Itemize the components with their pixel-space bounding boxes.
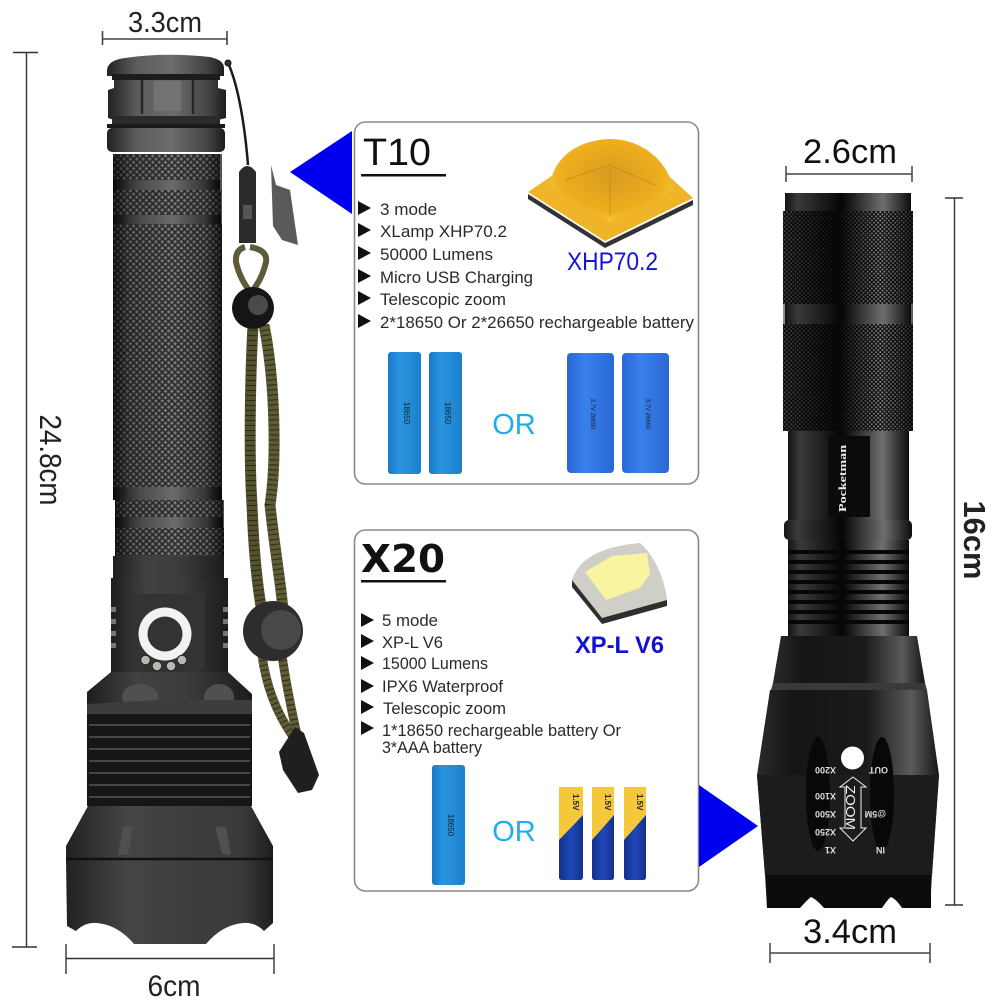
zoom scale markings	[815, 765, 888, 855]
batteries: three AAA	[559, 787, 646, 880]
dimension: 2.6cm top width of X20: 2.6cm	[803, 133, 897, 171]
feature list: T10: XLamp XHP70.2	[380, 222, 507, 241]
zoom scale markings: @5M	[865, 809, 886, 819]
label: XHP70.2: XHP70.2	[567, 248, 658, 276]
LED chip: XHP70.2	[528, 139, 693, 248]
heading: X20: X20	[361, 537, 445, 581]
batteries: three AAA: 1.5V	[635, 794, 644, 811]
knurled grip	[783, 211, 913, 431]
LED chip: XP-L V6	[572, 543, 667, 624]
zoom head	[757, 636, 939, 908]
T10 flashlight	[66, 55, 319, 944]
batteries: three AAA: 1.5V	[603, 794, 612, 811]
dimension: 24.8cm length of T10	[12, 52, 68, 947]
pointer: blue triangle to X20 flashlight	[699, 785, 758, 867]
batteries: three AAA: 1.5V	[571, 794, 580, 811]
heading: T10: T10	[363, 132, 431, 174]
zoom scale markings: X100	[815, 791, 836, 801]
barrel with brand: Pocketman	[837, 445, 849, 512]
dimension: 2.6cm top width of X20	[786, 133, 912, 182]
feature list: X20: 5 mode	[382, 611, 438, 630]
panel: T10	[354, 122, 698, 484]
batteries: two 26650: 3.7V 26650	[589, 399, 595, 430]
bezel	[66, 806, 273, 944]
batteries: two 18650: 18650	[443, 402, 452, 425]
tail cap	[107, 55, 226, 152]
lanyard	[225, 60, 319, 793]
dimension: 24.8cm length of T10: 24.8cm	[33, 414, 68, 506]
zoom scale markings: IN	[876, 845, 885, 855]
feature list: T10: 2*18650 Or 2*26650 rechargeable battery	[380, 313, 694, 332]
label: XP-L V6: XP-L V6	[575, 632, 664, 659]
zoom button	[841, 746, 864, 770]
feature list: T10: Telescopic zoom	[380, 290, 506, 309]
dimension: 3.4cm head width of X20: 3.4cm	[803, 913, 897, 951]
feature list: X20: Telescopic zoom	[383, 699, 506, 718]
batteries: two 26650	[567, 353, 669, 473]
feature list: X20: 3*AAA battery	[382, 738, 482, 757]
feature list: X20	[361, 611, 621, 757]
dimension: 3.3cm top width of T10: 3.3cm	[128, 7, 202, 39]
dimension: 16cm length of X20	[945, 198, 992, 905]
dimension: 3.4cm head width of X20	[770, 913, 930, 963]
OR label: OR	[492, 816, 536, 848]
indicator lights	[141, 655, 187, 671]
feature list: T10: 50000 Lumens	[380, 245, 493, 264]
zoom scale markings: X250	[815, 827, 836, 837]
dimension: 6cm head width of T10	[66, 944, 274, 1000]
feature list: X20: 15000 Lumens	[382, 654, 488, 673]
X20 flashlight	[757, 193, 939, 908]
knurled body	[113, 154, 224, 557]
feature list: T10: 3 mode	[380, 200, 437, 219]
finned head	[87, 672, 252, 806]
feature list: X20: 1*18650 rechargeable battery Or	[382, 721, 621, 740]
ribbed neck	[788, 540, 909, 636]
zoom scale markings: X500	[815, 809, 836, 819]
feature list: X20: IPX6 Waterproof	[382, 677, 503, 696]
zoom scale markings: X200	[815, 765, 836, 775]
switch housing	[111, 556, 228, 672]
barrel with brand	[784, 431, 912, 540]
feature list: T10: Micro USB Charging	[380, 268, 533, 287]
dimension: 16cm length of X20: 16cm	[957, 500, 992, 580]
crown notches	[800, 897, 902, 908]
batteries: two 26650: 3.7V 26650	[644, 399, 650, 430]
feature list: T10	[358, 200, 694, 332]
panel: X20	[354, 530, 698, 891]
battery: one 18650: 18650	[446, 814, 455, 837]
batteries: two 18650	[388, 352, 462, 474]
feature list: X20: XP-L V6	[382, 633, 443, 652]
batteries: two 18650: 18650	[402, 402, 411, 425]
pointer: blue triangle to T10 panel	[290, 131, 352, 214]
power button	[138, 608, 192, 660]
tail cap	[785, 193, 911, 211]
dimension: 3.3cm top width of T10	[102, 7, 227, 45]
battery: one 18650	[432, 765, 465, 885]
zoom scale markings: OUT	[868, 765, 888, 775]
OR label: OR	[492, 409, 536, 441]
zoom scale markings: ZOOM	[843, 785, 858, 830]
zoom scale markings: X1	[825, 845, 836, 855]
